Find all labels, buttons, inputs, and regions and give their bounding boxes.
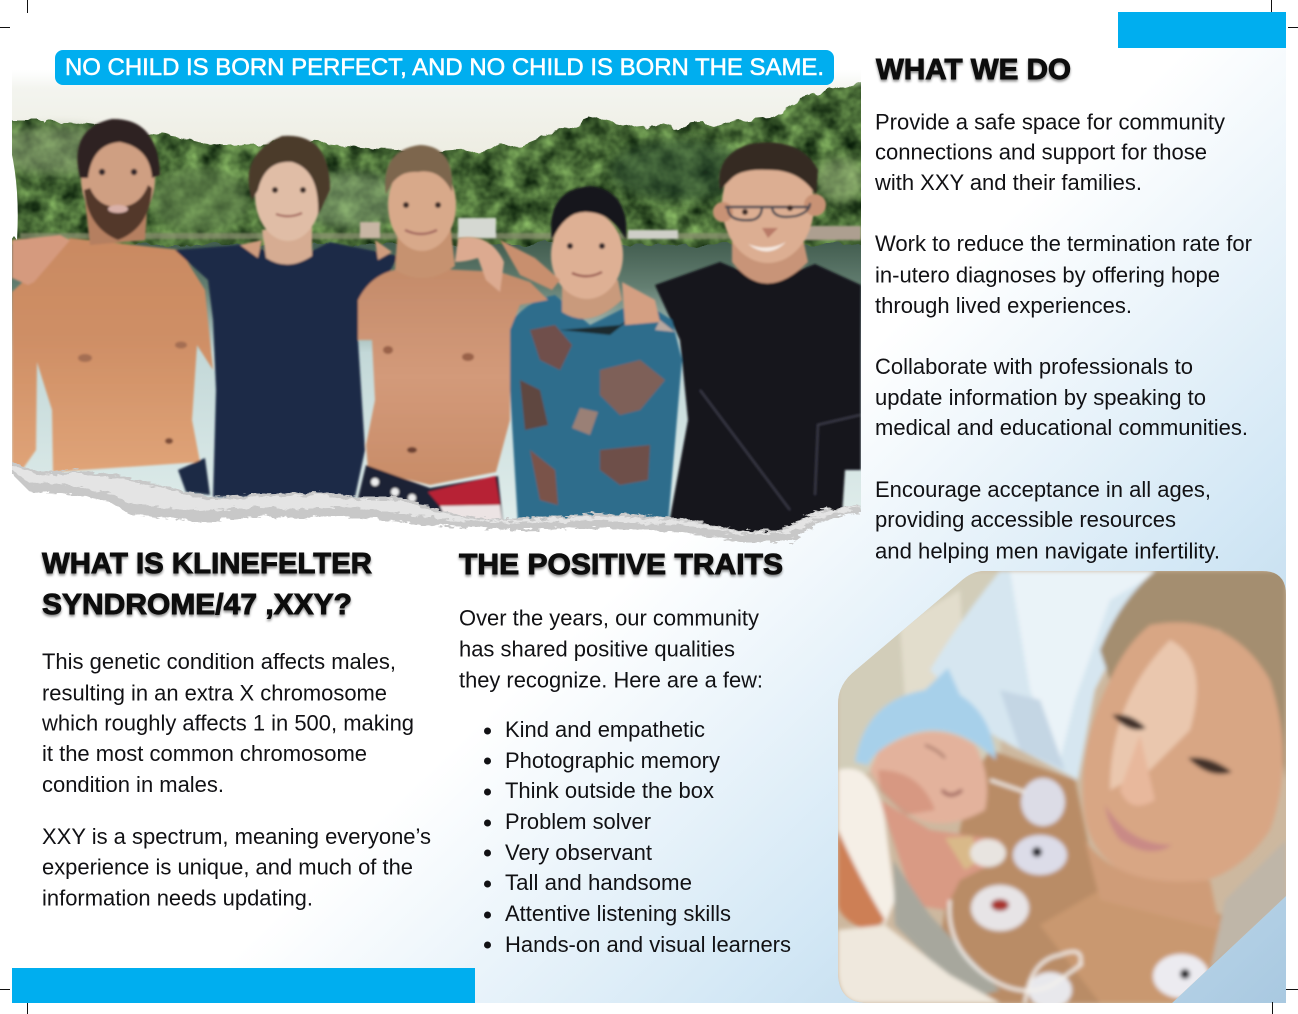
torn left edge of photo xyxy=(11,150,18,240)
white blanket xyxy=(838,769,895,925)
text block: what we do: Work to reduce the termination rate for xyxy=(875,231,1252,256)
text block: what we do: medical and educational communities. xyxy=(875,415,1248,440)
baby hat xyxy=(855,668,996,765)
heading: what is klinefelter syndrome: SYNDROME/47 ,XXY? xyxy=(42,589,352,621)
accent bar: top right xyxy=(1118,12,1286,48)
text block: definition: which roughly affects 1 in 500, making xyxy=(41,710,414,736)
heading: what is klinefelter syndrome xyxy=(42,548,372,621)
text block: what we do: connections and support for those xyxy=(875,140,1207,164)
text block: positive traits intro xyxy=(459,606,763,692)
text block: what we do: with XXY and their families. xyxy=(874,170,1142,195)
text block: what we do: Collaborate with professionals to xyxy=(875,354,1193,379)
bullet list: positive traits: Tall and handsome xyxy=(505,870,692,895)
top fade xyxy=(12,70,861,88)
chest xyxy=(940,750,1100,1003)
text block: what we do: in-utero diagnoses by offering hope xyxy=(875,262,1220,288)
man 5 black tee xyxy=(655,262,861,545)
wire loop xyxy=(949,900,1081,1003)
baby body and arm xyxy=(882,802,984,910)
heading: what we do: WHAT WE DO xyxy=(876,54,1071,86)
speckled gown xyxy=(893,860,1000,1003)
woman's face xyxy=(1083,622,1283,885)
man 2 navy tee xyxy=(175,242,398,497)
pillow beige xyxy=(838,571,1010,780)
forest xyxy=(0,82,880,245)
text block: positive traits intro: they recognize. Here are a few: xyxy=(459,668,763,692)
baby head xyxy=(870,732,987,823)
people xyxy=(12,119,861,545)
text block: definition: information needs updating. xyxy=(42,886,313,910)
heading: what is klinefelter syndrome: WHAT IS KLINEFELTER xyxy=(42,548,372,580)
text block: positive traits intro: Over the years, our community xyxy=(459,606,760,630)
text block: definition: experience is unique, and much of the xyxy=(42,854,413,880)
man 4 teal shirt xyxy=(505,295,682,525)
text block: definition: it the most common chromosome xyxy=(42,741,367,766)
text block: what we do: through lived experiences. xyxy=(875,293,1132,318)
photo: mother with newborn xyxy=(838,571,1286,1008)
pillow blue xyxy=(930,571,1160,780)
woman's pillow right xyxy=(1210,840,1286,970)
bullet list: positive traits xyxy=(484,717,791,957)
man 1 xyxy=(12,238,213,472)
man 3 xyxy=(358,268,548,485)
text block: what we do xyxy=(874,110,1252,564)
text block: definition: resulting in an extra X chromosome xyxy=(42,680,387,706)
text block: what we do: update information by speaking to xyxy=(875,385,1206,410)
neck xyxy=(1088,846,1218,914)
bullet list: positive traits: Photographic memory xyxy=(505,748,721,773)
torn paper edge under photo xyxy=(12,462,861,542)
shoreline houses xyxy=(20,218,861,240)
banner headline: NO CHILD IS BORN PERFECT, AND NO CHILD IS BORN THE SAME. xyxy=(65,54,824,81)
man 3 shorts xyxy=(358,465,503,522)
text block: what we do: Provide a safe space for community xyxy=(875,110,1226,134)
text block: what we do: Encourage acceptance in all ages, xyxy=(875,477,1211,502)
text block: positive traits intro: has shared positive qualities xyxy=(459,636,735,662)
text block: definition: XXY is a spectrum, meaning everyone’s xyxy=(42,824,431,849)
bullet list: positive traits: Attentive listening skills xyxy=(505,901,731,926)
text block: definition: condition in males. xyxy=(42,772,224,797)
text block: what we do: and helping men navigate infertility. xyxy=(875,538,1220,564)
heading: the positive traits: THE POSITIVE TRAITS xyxy=(459,549,783,581)
text block: definition: This genetic condition affects males, xyxy=(42,649,396,674)
adult hand xyxy=(838,830,885,932)
woman's eyes, mouth xyxy=(1112,715,1146,730)
text block: definition xyxy=(41,649,431,910)
accent bar: bottom left xyxy=(12,968,475,1003)
bullet list: positive traits: Hands-on and visual learners xyxy=(505,932,791,957)
woman's hair xyxy=(1100,571,1286,780)
bullet list: positive traits: Very observant xyxy=(505,840,653,865)
photo: five young men at a lake xyxy=(0,70,880,545)
bullet list: positive traits: Kind and empathetic xyxy=(505,717,705,742)
electrodes xyxy=(1021,778,1065,826)
text block: what we do: providing accessible resources xyxy=(875,507,1176,532)
bullet list: positive traits: Think outside the box xyxy=(505,778,715,803)
bullet list: positive traits: Problem solver xyxy=(505,809,651,834)
sheet xyxy=(838,925,1000,1003)
